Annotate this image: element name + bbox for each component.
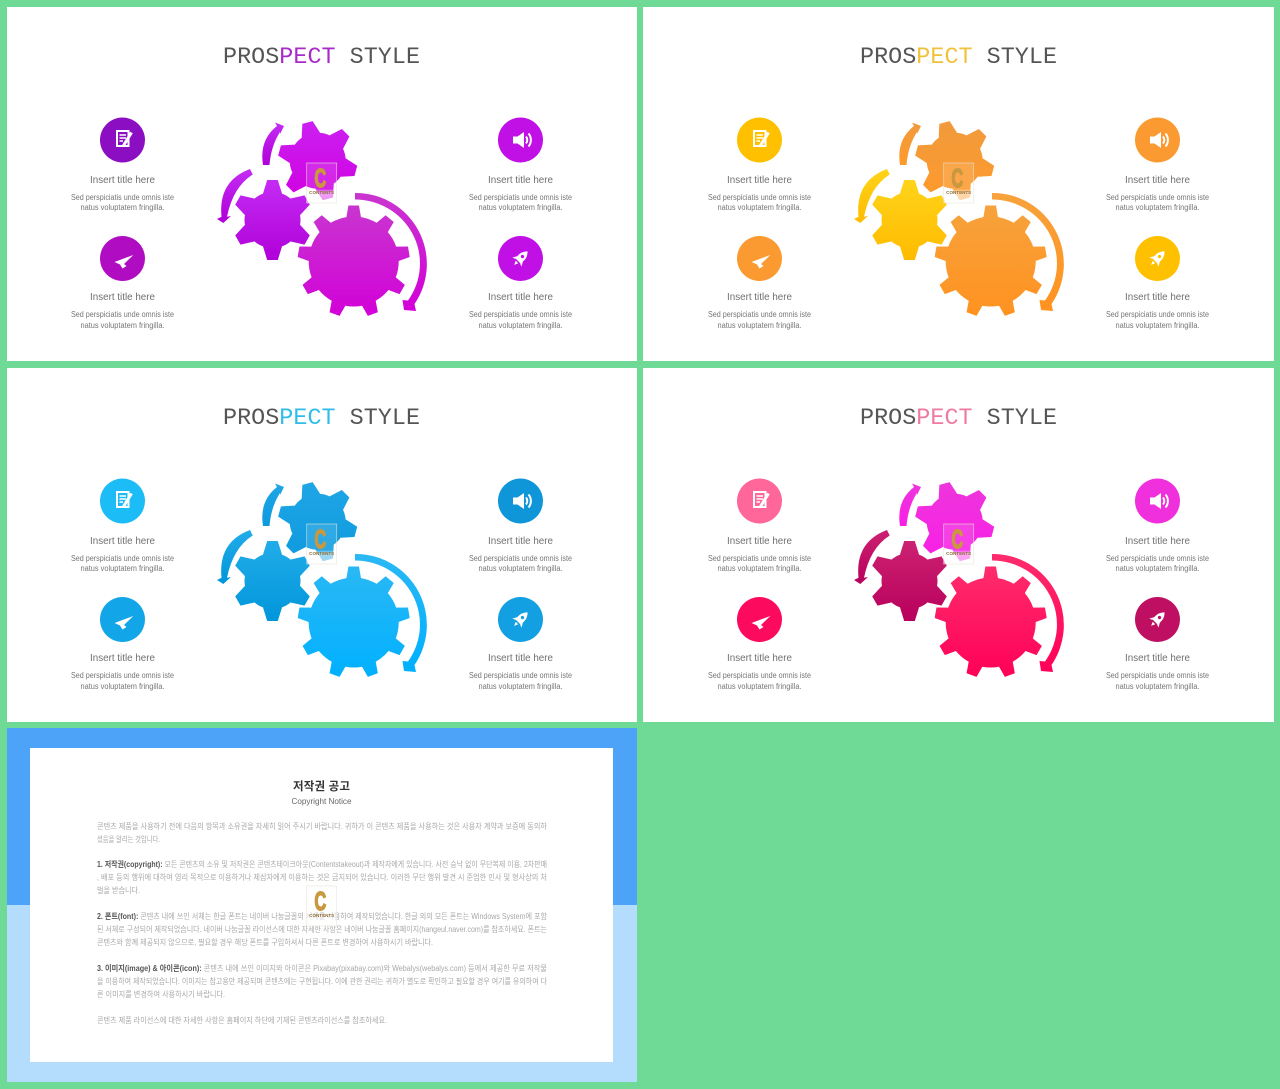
item: top right: natus voluptatem fringilla. — [1116, 203, 1200, 212]
item: top left: natus voluptatem fringilla. — [718, 564, 802, 573]
panel: pink — [643, 368, 1274, 722]
panel: purple — [7, 7, 637, 361]
item: top left: natus voluptatem fringilla. — [80, 564, 164, 573]
item: top right: Insert title here — [488, 535, 553, 547]
panel: copyright notice — [7, 728, 637, 1082]
panel: blue — [7, 368, 637, 722]
item: bottom left: Sed perspiciatis unde omnis iste — [708, 310, 811, 319]
copyright body text — [97, 821, 548, 1025]
copyright body text: 콘텐츠와 함께 제공되지 않으므로, 필요할 경우 해당 폰트를 구입하셔서 다른 폰트로 변경하여 사용하시기 바랍니다. — [97, 937, 433, 947]
copyright body text: 른 이미지를 변경하여 사용하시기 바랍니다. — [97, 989, 225, 999]
item: top right: Sed perspiciatis unde omnis iste — [469, 554, 572, 563]
item: top right: Sed perspiciatis unde omnis iste — [1106, 193, 1209, 202]
item: bottom right — [1106, 597, 1209, 691]
item: top right — [469, 478, 572, 573]
item: top right — [1106, 118, 1209, 212]
title: PROSPECT STYLE — [860, 406, 1057, 432]
item: top right: natus voluptatem fringilla. — [478, 203, 562, 212]
item: bottom left: natus voluptatem fringilla. — [80, 321, 164, 330]
item: top left: Sed perspiciatis unde omnis iste — [708, 193, 811, 202]
copyright body text: 1. 저작권(copyright): 모든 콘텐츠의 소유 및 저작권은 콘텐츠테이크아웃(Contentstakeout)과 제작자에게 있습니다. 사전 승낙 없이 무단복제 이용, 2차판매 — [97, 859, 547, 869]
item: top right: Sed perspiciatis unde omnis iste — [469, 193, 572, 202]
gears and arrows — [217, 121, 427, 318]
item: top left: Sed perspiciatis unde omnis iste — [71, 554, 174, 563]
item: top right: Insert title here — [488, 174, 553, 186]
item: bottom right: Insert title here — [1125, 291, 1190, 303]
item: top left: natus voluptatem fringilla. — [718, 203, 802, 212]
item: bottom left — [71, 597, 174, 691]
item: bottom right: Sed perspiciatis unde omnis iste — [469, 671, 572, 680]
gears and arrows — [854, 482, 1064, 678]
item: bottom right — [469, 597, 572, 691]
item: top left: Insert title here — [727, 535, 792, 547]
item: top right: Insert title here — [1125, 535, 1190, 547]
title: PROSPECT STYLE — [860, 45, 1057, 71]
item: bottom left: Insert title here — [90, 291, 155, 303]
item: bottom left: Sed perspiciatis unde omnis iste — [71, 671, 174, 680]
item: bottom left: Sed perspiciatis unde omnis iste — [708, 671, 811, 680]
item: top left — [71, 118, 174, 212]
item: bottom left: natus voluptatem fringilla. — [80, 682, 164, 691]
item: bottom right: Sed perspiciatis unde omnis iste — [469, 310, 572, 319]
panel: orange — [643, 7, 1274, 361]
item: bottom right: natus voluptatem fringilla. — [478, 682, 562, 691]
copyright body text: 셨음을 알리는 것입니다. — [97, 834, 160, 844]
item: bottom left: Insert title here — [727, 291, 792, 303]
copyright body text: , 배포 등의 행위에 대하여 영리 목적으로 이용하거나 제삼자에게 이용하는 것은 금지되어 있습니다. 이러한 무단 행위 발견 시 준엄한 민사 및 형사상의 처 — [97, 872, 547, 882]
item: bottom left: Insert title here — [90, 652, 155, 664]
item: bottom right: natus voluptatem fringilla. — [1116, 682, 1200, 691]
watermark — [307, 886, 337, 926]
item: bottom right: Sed perspiciatis unde omnis iste — [1106, 310, 1209, 319]
copyright body text: 콘텐츠 제품을 사용하기 전에 다음의 항목과 소유권을 자세히 읽어 주시기 바랍니다. 귀하가 이 콘텐츠 제품을 사용하는 것은 사용자 계약과 보증에 동의하 — [97, 821, 548, 831]
item: top left: natus voluptatem fringilla. — [80, 203, 164, 212]
item: bottom right — [469, 236, 572, 330]
copyright body text: 된 서체로 구성되어 제작되었습니다. 네이버 나눔글꼴 라이선스에 대한 자세한 사항은 네이버 나눔글꼴 홈페이지(hangeul.naver.com)를 참조하세요. 폰트는 — [97, 924, 547, 934]
title: PROSPECT STYLE — [223, 406, 420, 432]
item: bottom left: Insert title here — [727, 652, 792, 664]
item: top right — [1106, 478, 1209, 573]
item: bottom right: Insert title here — [1125, 652, 1190, 664]
item: bottom right: Insert title here — [488, 652, 553, 664]
copyright body text: 2. 폰트(font): 콘텐츠 내에 쓰인 서체는 한글 폰트는 네이버 나눔글꼴의 서체를 사용하여 제작되었습니다. 한글 외의 모든 폰트는 Windows System에 포함 — [97, 911, 548, 921]
gears and arrows — [217, 482, 427, 678]
item: top left: Insert title here — [90, 174, 155, 186]
item: top right — [469, 118, 572, 212]
item: top right: natus voluptatem fringilla. — [1116, 564, 1200, 573]
item: bottom left — [71, 236, 174, 330]
item: bottom right: Sed perspiciatis unde omnis iste — [1106, 671, 1209, 680]
title: PROSPECT STYLE — [223, 45, 420, 71]
item: bottom left — [708, 597, 811, 691]
item: bottom left: natus voluptatem fringilla. — [718, 682, 802, 691]
item: bottom right: natus voluptatem fringilla. — [478, 321, 562, 330]
item: bottom right — [1106, 236, 1209, 330]
gears and arrows — [854, 121, 1064, 318]
item: bottom right: natus voluptatem fringilla. — [1116, 321, 1200, 330]
item: top left — [71, 478, 174, 573]
copyright body text: 3. 이미지(image) & 아이콘(icon): 콘텐츠 내에 쓰인 이미지와 아이콘은 Pixabay(pixabay.com)와 Webalys(webalys.com) 등에서 제공한 무료 저작물 — [97, 963, 547, 973]
copyright heading: 저작권 공고 — [293, 779, 350, 793]
item: top right: natus voluptatem fringilla. — [478, 564, 562, 573]
item: top left — [708, 478, 811, 573]
item: top left: Sed perspiciatis unde omnis iste — [708, 554, 811, 563]
copyright body text: 을 이용하여 제작되었습니다. 이미지는 참고용만 제공되며 콘텐츠에는 구현됩니다. 이에 관한 권리는 귀하가 별도로 확인하고 필요할 경우 여기를 유의하여 다 — [97, 976, 548, 986]
item: bottom right: Insert title here — [488, 291, 553, 303]
item: top left: Insert title here — [90, 535, 155, 547]
item: bottom left: natus voluptatem fringilla. — [718, 321, 802, 330]
item: top left — [708, 118, 811, 212]
item: top left: Insert title here — [727, 174, 792, 186]
item: bottom left: Sed perspiciatis unde omnis iste — [71, 310, 174, 319]
copyright subheading: Copyright Notice — [292, 797, 352, 806]
item: top left: Sed perspiciatis unde omnis iste — [71, 193, 174, 202]
copyright body text: 벌을 받습니다. — [97, 885, 140, 895]
item: bottom left — [708, 236, 811, 330]
copyright body text: 콘텐츠 제품 라이선스에 대한 자세한 사항은 홈페이지 하단에 기재된 콘텐츠라이선스를 참조하세요. — [97, 1015, 387, 1025]
item: top right: Sed perspiciatis unde omnis iste — [1106, 554, 1209, 563]
item: top right: Insert title here — [1125, 174, 1190, 186]
